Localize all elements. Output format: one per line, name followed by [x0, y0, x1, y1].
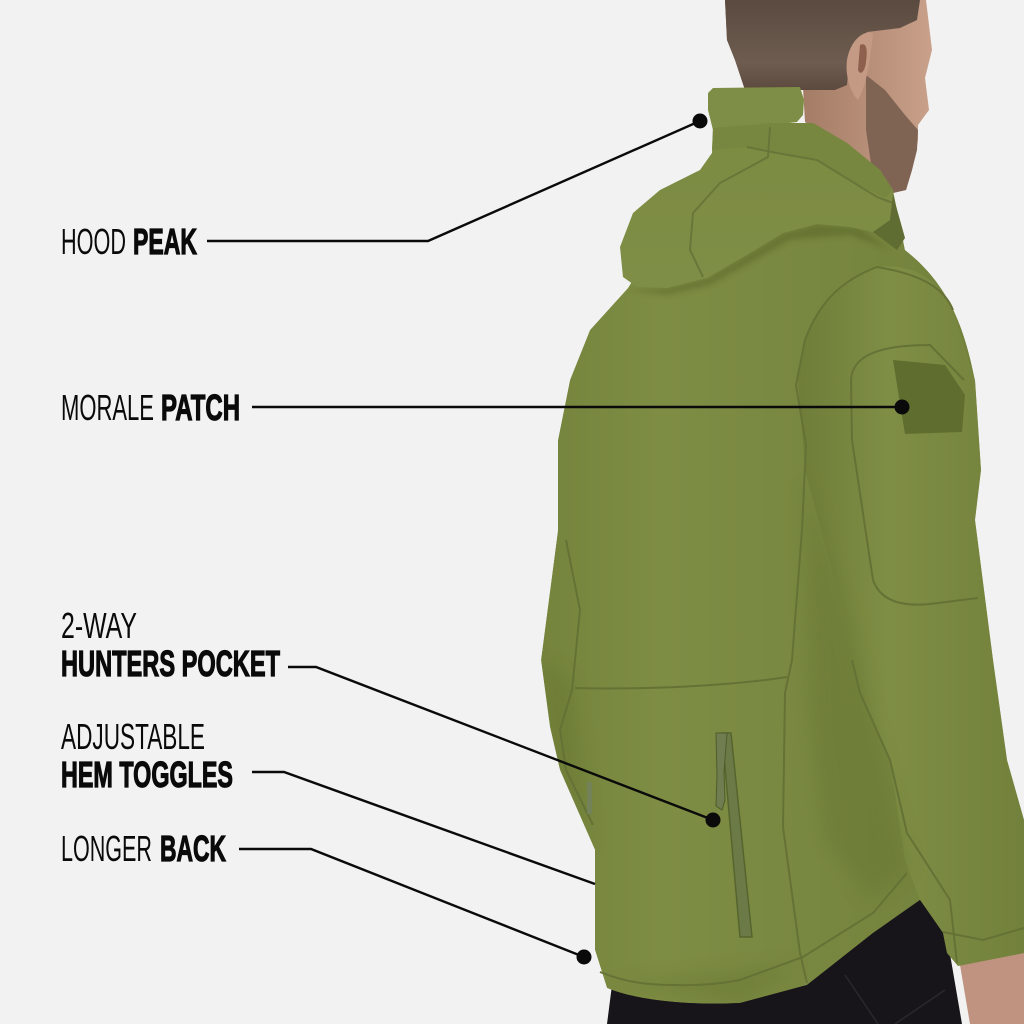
neck zipper [873, 195, 905, 250]
head and neck [725, 0, 932, 193]
side toggle [587, 782, 592, 814]
callout: hood peak: HOOD [61, 221, 126, 262]
callout: morale patch: PATCH [161, 387, 240, 428]
jacket seams [560, 267, 1024, 985]
callout: morale patch [61, 387, 910, 428]
callout: adjustable hem toggles [61, 716, 595, 884]
photo: man wearing fleece jacket [540, 0, 1024, 1024]
pocket zipper [716, 733, 752, 937]
sleeve [798, 266, 1024, 966]
hood [620, 87, 905, 288]
callout: morale patch: MORALE [61, 387, 154, 428]
callout: hood peak [61, 114, 708, 262]
trousers [607, 895, 962, 1024]
callout: 2-way hunters pocket [61, 605, 720, 828]
collar [708, 87, 804, 130]
callout: 2-way hunters pocket: 2-WAY [61, 605, 137, 646]
callout: longer back [61, 828, 592, 964]
callout: 2-way hunters pocket: HUNTERS POCKET [61, 643, 280, 684]
callout: adjustable hem toggles: ADJUSTABLE [61, 716, 205, 757]
shading [540, 224, 908, 1005]
callout: hood peak: PEAK [133, 221, 197, 262]
callout: longer back: LONGER [61, 828, 152, 869]
ear [847, 33, 873, 100]
morale patch [893, 360, 965, 434]
jacket body [541, 170, 1024, 1004]
callout: adjustable hem toggles: HEM TOGGLES [61, 754, 233, 795]
hand [960, 950, 1024, 1024]
callout: longer back: BACK [160, 828, 226, 869]
